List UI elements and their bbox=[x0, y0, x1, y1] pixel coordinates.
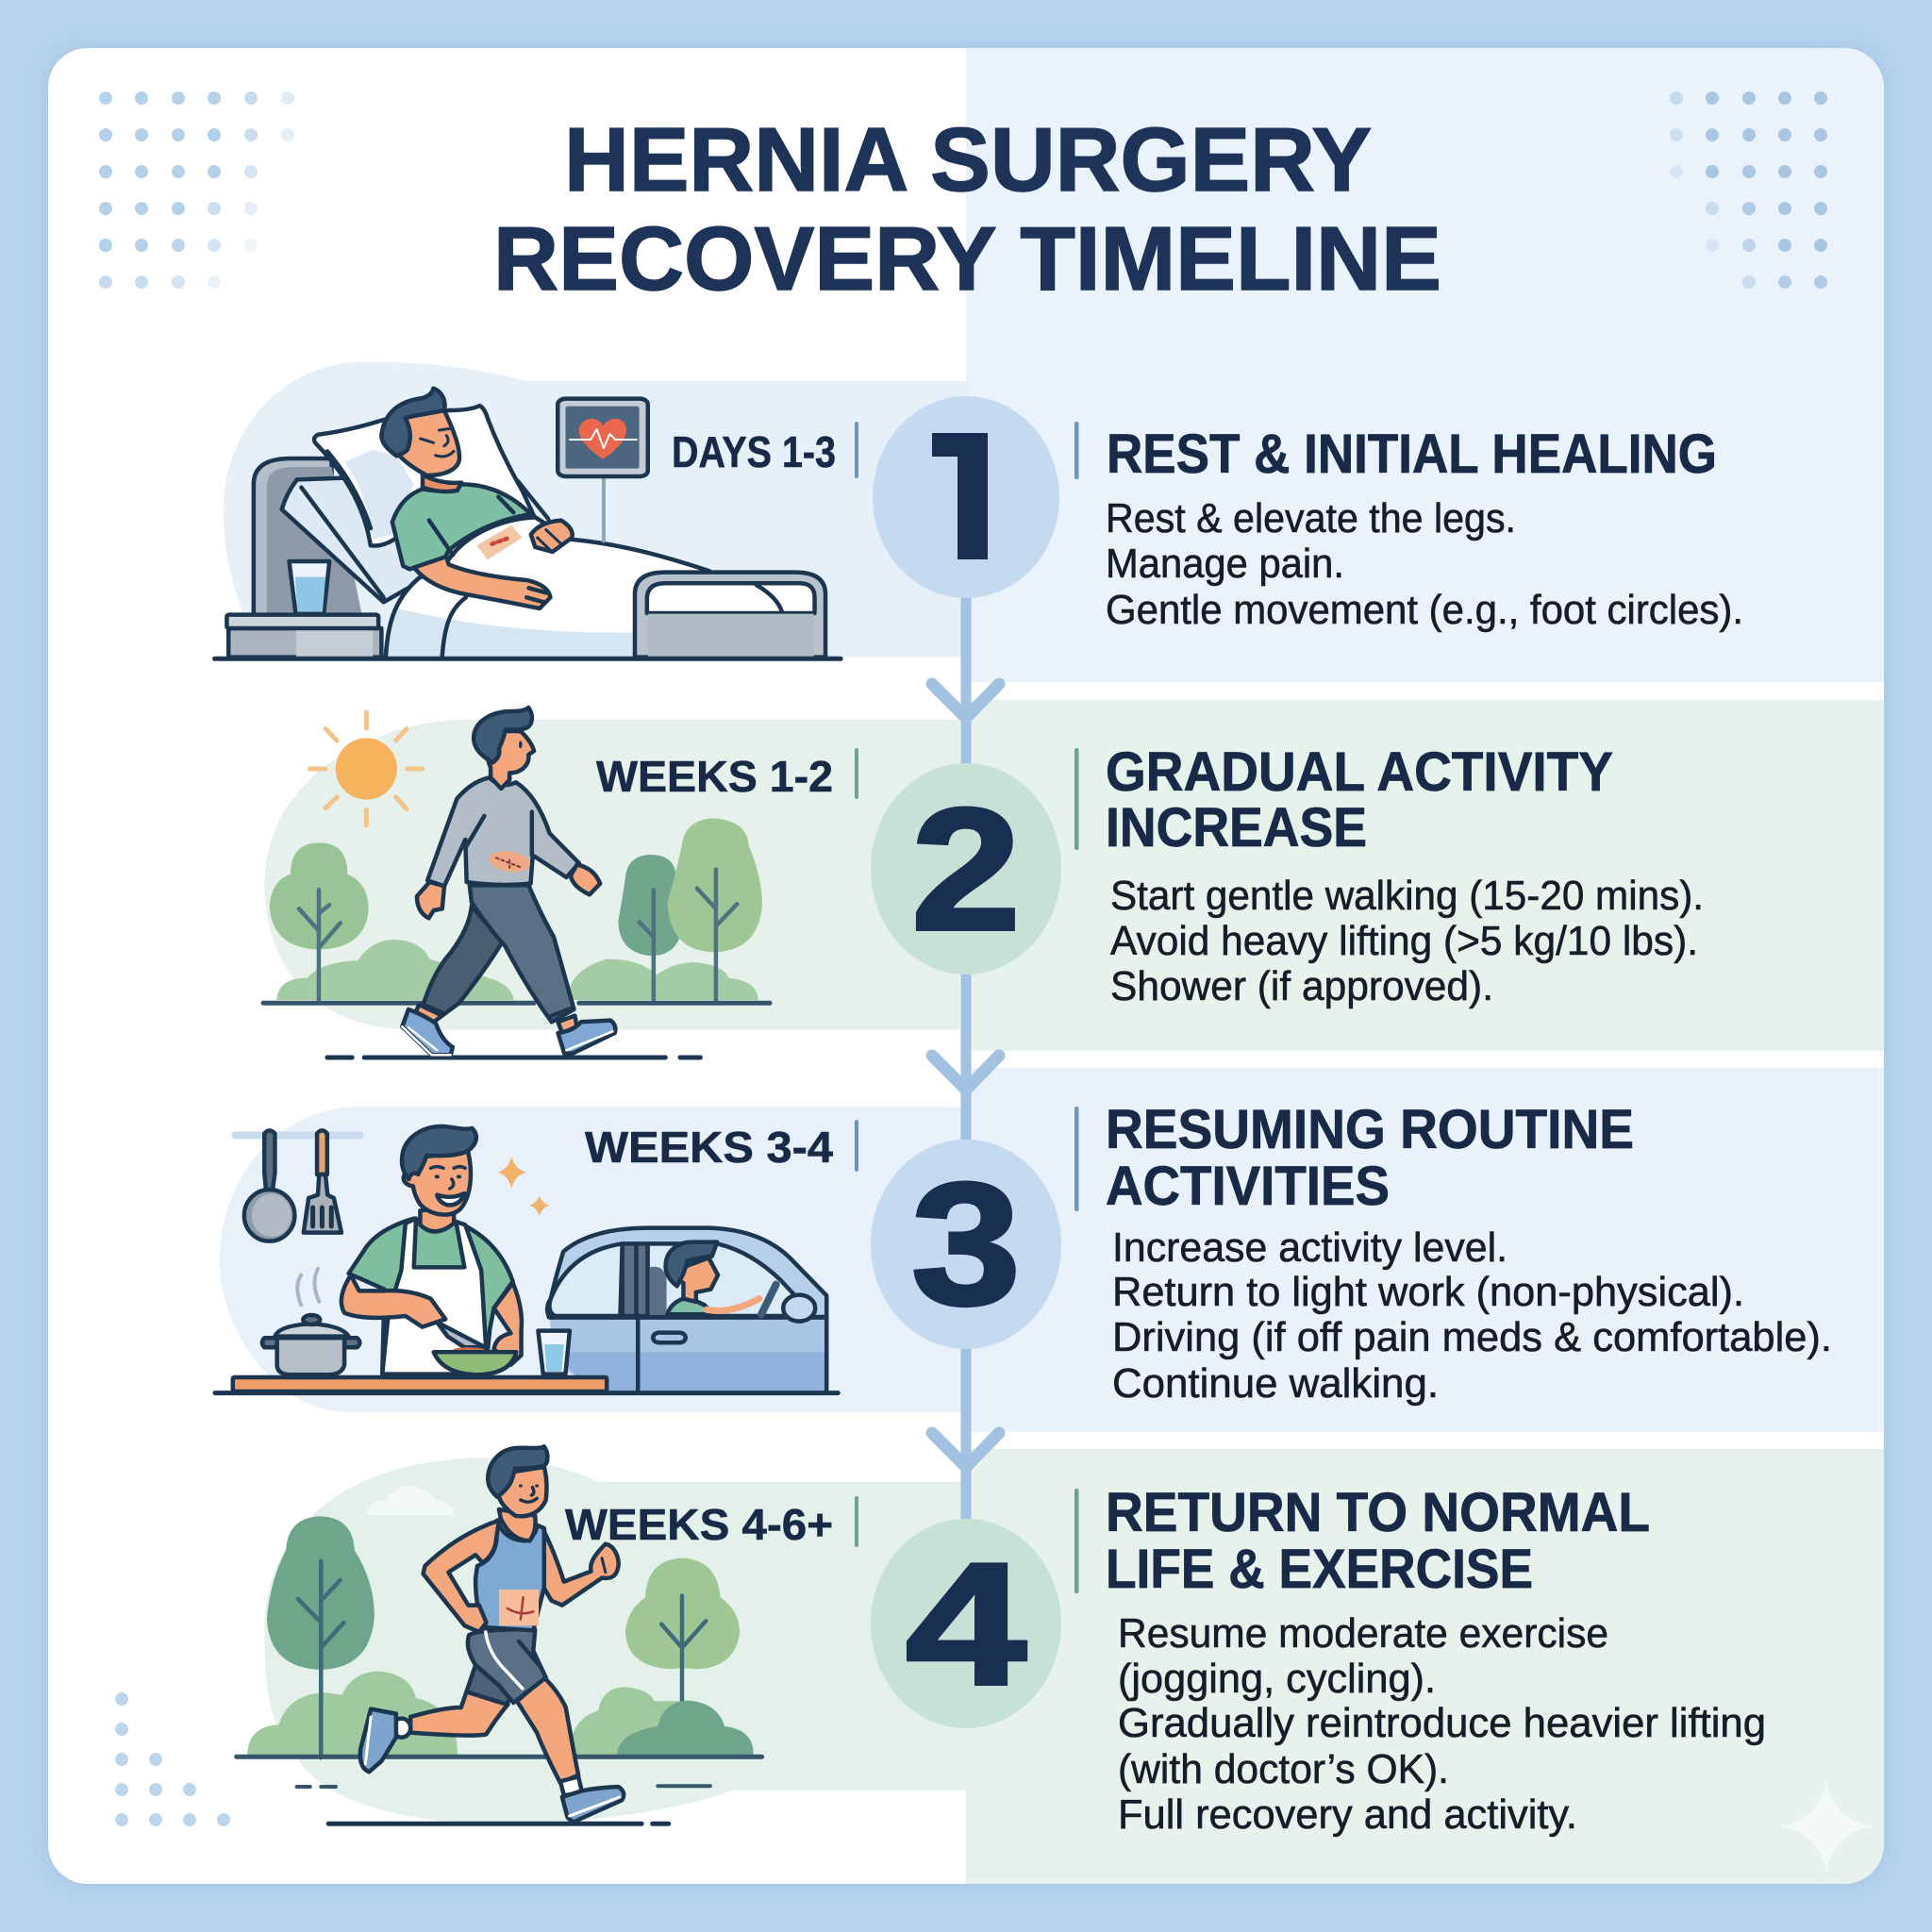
cook bbox=[341, 1126, 522, 1374]
panel: step 1 text: Manage pain. bbox=[1106, 541, 1344, 587]
icon: heart monitor bbox=[558, 399, 648, 541]
bed foot rail bbox=[635, 573, 825, 658]
panel: step 3 text: Driving (if off pain meds & comfortable). bbox=[1112, 1315, 1832, 1360]
divider bar: weeks 1-2 bbox=[855, 748, 858, 799]
decorative dots: bottom left bbox=[115, 1692, 230, 1826]
icon: sparkle bbox=[1781, 1781, 1872, 1872]
panel: step 2 text: Start gentle walking (15-20 mins). bbox=[1110, 874, 1704, 919]
panel: step 3 text: Continue walking. bbox=[1112, 1361, 1439, 1407]
nightstand bbox=[226, 615, 381, 658]
divider bar: weeks 3-4 bbox=[855, 1120, 858, 1172]
icon: glass of water bbox=[538, 1331, 570, 1374]
countertop bbox=[233, 1377, 607, 1391]
step 2 circle: 2 bbox=[911, 772, 1021, 966]
step 3 circle: 3 bbox=[911, 1146, 1021, 1341]
panel: step 4 text: Gradually reintroduce heavier lifting bbox=[1118, 1701, 1766, 1746]
panel: step 3 text: ACTIVITIES bbox=[1106, 1156, 1390, 1217]
panel: step 4 text: (jogging, cycling). bbox=[1118, 1657, 1436, 1702]
panel: step 2 text bbox=[1074, 741, 1704, 1009]
title: RECOVERY TIMELINE bbox=[493, 208, 1441, 309]
panel: step 3 text: RESUMING ROUTINE bbox=[1106, 1099, 1634, 1160]
panel: step 2 text: Shower (if approved). bbox=[1110, 964, 1493, 1009]
icon: steaming pot bbox=[262, 1269, 359, 1374]
panel: step 1 text: REST & INITIAL HEALING bbox=[1107, 424, 1717, 485]
icon: water glass bbox=[290, 561, 329, 613]
label: weeks 4-6+: WEEKS 4-6+ bbox=[565, 1500, 833, 1549]
decorative dots: top left bbox=[99, 92, 294, 289]
icon: hanging pan bbox=[244, 1130, 294, 1241]
car bbox=[547, 1228, 826, 1391]
panel: step 4 text: (with doctor’s OK). bbox=[1118, 1747, 1449, 1792]
panel: step 1 text bbox=[1074, 422, 1743, 633]
panel: step 1 text: Rest & elevate the legs. bbox=[1106, 496, 1516, 541]
divider bar: weeks 4-6+ bbox=[855, 1496, 858, 1547]
label: days 1-3: DAYS 1-3 bbox=[672, 427, 836, 476]
panel: step 3 text: Increase activity level. bbox=[1112, 1225, 1507, 1271]
step 4 circle: 4 bbox=[906, 1526, 1026, 1721]
decorative dots: top right bbox=[1670, 92, 1827, 289]
illustration: walking outdoors bbox=[263, 708, 960, 1058]
running person bbox=[360, 1446, 624, 1823]
title bbox=[493, 109, 1441, 309]
walking person bbox=[402, 708, 615, 1055]
panel: step 4 text: LIFE & EXERCISE bbox=[1106, 1539, 1533, 1600]
step 1 circle: 1 bbox=[925, 402, 1016, 596]
step 4 circle bbox=[871, 1519, 1061, 1728]
icon: sun bbox=[309, 712, 423, 825]
panel: step 2 text: GRADUAL ACTIVITY bbox=[1106, 741, 1613, 803]
panel: step 2 text: Avoid heavy lifting (>5 kg/10 lbs). bbox=[1110, 919, 1698, 964]
panel: step 4 text: Resume moderate exercise bbox=[1118, 1611, 1608, 1657]
panel: step 4 text: RETURN TO NORMAL bbox=[1106, 1482, 1650, 1543]
panel: step 3 text bbox=[1074, 1099, 1832, 1407]
panel: step 4 text: Full recovery and activity. bbox=[1118, 1792, 1577, 1838]
panel: step 3 text: Return to light work (non-physical). bbox=[1112, 1270, 1744, 1315]
label: weeks 3-4: WEEKS 3-4 bbox=[585, 1123, 833, 1172]
illustration: jogging outdoors bbox=[237, 1446, 967, 1824]
step 3 circle bbox=[871, 1140, 1061, 1349]
label: weeks 1-2: WEEKS 1-2 bbox=[596, 752, 833, 801]
panel: step 2 text: INCREASE bbox=[1106, 797, 1367, 858]
title: HERNIA SURGERY bbox=[564, 109, 1372, 210]
illustration: cooking and driving bbox=[215, 1107, 966, 1412]
panel: step 4 text bbox=[1074, 1482, 1766, 1838]
divider bar: days 1-3 bbox=[855, 422, 858, 478]
step 1 circle bbox=[873, 396, 1059, 598]
timeline connector bbox=[932, 590, 999, 1524]
icon: sparkles bbox=[497, 1157, 549, 1216]
icon: hanging spatula bbox=[304, 1130, 341, 1233]
panel: step 1 text: Gentle movement (e.g., foot circles). bbox=[1106, 588, 1743, 633]
illustration: resting in hospital bed bbox=[215, 362, 969, 658]
step 2 circle bbox=[871, 763, 1061, 974]
